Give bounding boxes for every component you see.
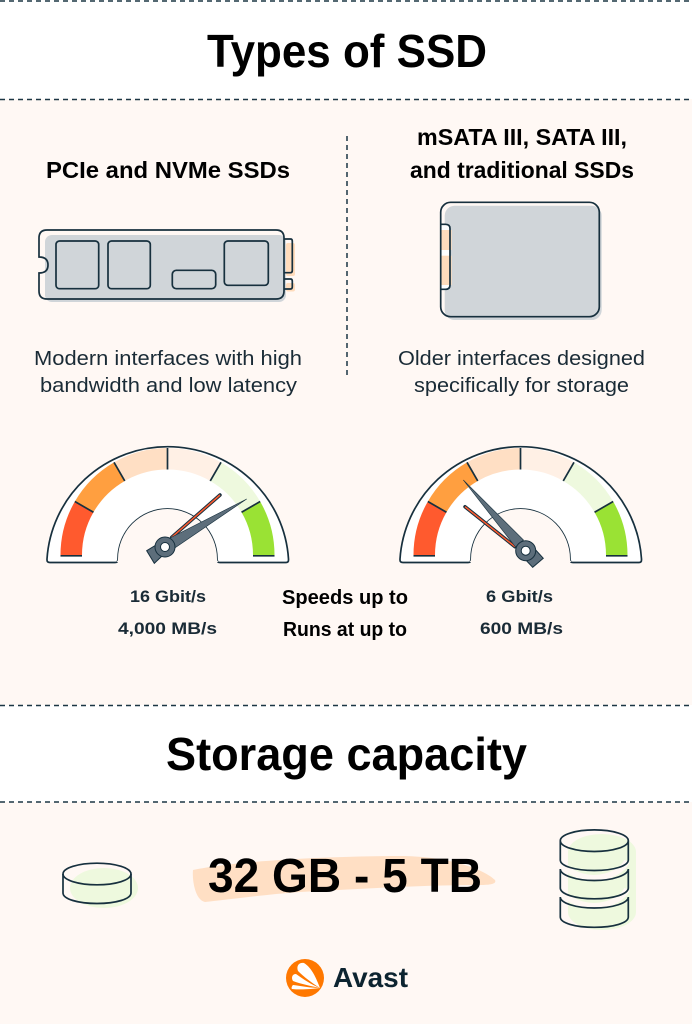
text: SATA description: Older interfaces designed	[398, 348, 645, 370]
text: PCIe description	[34, 348, 302, 397]
logo: Avast	[286, 959, 408, 997]
icon: SATA SSD	[441, 202, 602, 320]
text: PCIe speeds: 16 Gbit/s	[130, 587, 206, 606]
icon: M.2 SSD	[39, 230, 295, 302]
icon: single disk	[63, 863, 138, 908]
needle: PCIe gauge	[147, 495, 247, 563]
text: speed row labels: Speeds up to	[282, 587, 408, 609]
gauge: SATA speed	[400, 447, 642, 567]
heading: mSATA III, SATA III, and traditional SSDs: and traditional SSDs	[410, 157, 634, 183]
gauge: PCIe speed	[47, 447, 288, 563]
text: SATA speeds: 6 Gbit/s	[486, 587, 553, 606]
heading: mSATA III, SATA III, and traditional SSDs: mSATA III, SATA III,	[417, 124, 627, 150]
text: SATA description	[398, 348, 645, 397]
heading: mSATA III, SATA III, and traditional SSDs	[410, 124, 634, 183]
text: SATA speeds	[480, 587, 563, 638]
text: PCIe description: bandwidth and low latency	[40, 375, 297, 397]
capacity range: 32 GB - 5 TB	[208, 850, 482, 903]
title: Types of SSD	[207, 25, 487, 77]
text: PCIe description: Modern interfaces with high	[34, 348, 302, 370]
logo: Avast: Avast	[333, 962, 408, 993]
highlight brush	[193, 856, 495, 902]
needle: SATA gauge	[463, 480, 543, 567]
text: PCIe speeds: 4,000 MB/s	[118, 619, 217, 638]
text: speed row labels	[282, 587, 408, 641]
icon: disk stack	[560, 830, 636, 930]
heading: PCIe and NVMe SSDs: PCIe and NVMe SSDs	[46, 157, 290, 183]
heading: storage capacity: Storage capacity	[166, 728, 527, 780]
text: PCIe speeds	[118, 587, 217, 638]
text: SATA description: specifically for storage	[414, 375, 629, 397]
text: SATA speeds: 600 MB/s	[480, 619, 563, 638]
text: speed row labels: Runs at up to	[283, 619, 407, 641]
